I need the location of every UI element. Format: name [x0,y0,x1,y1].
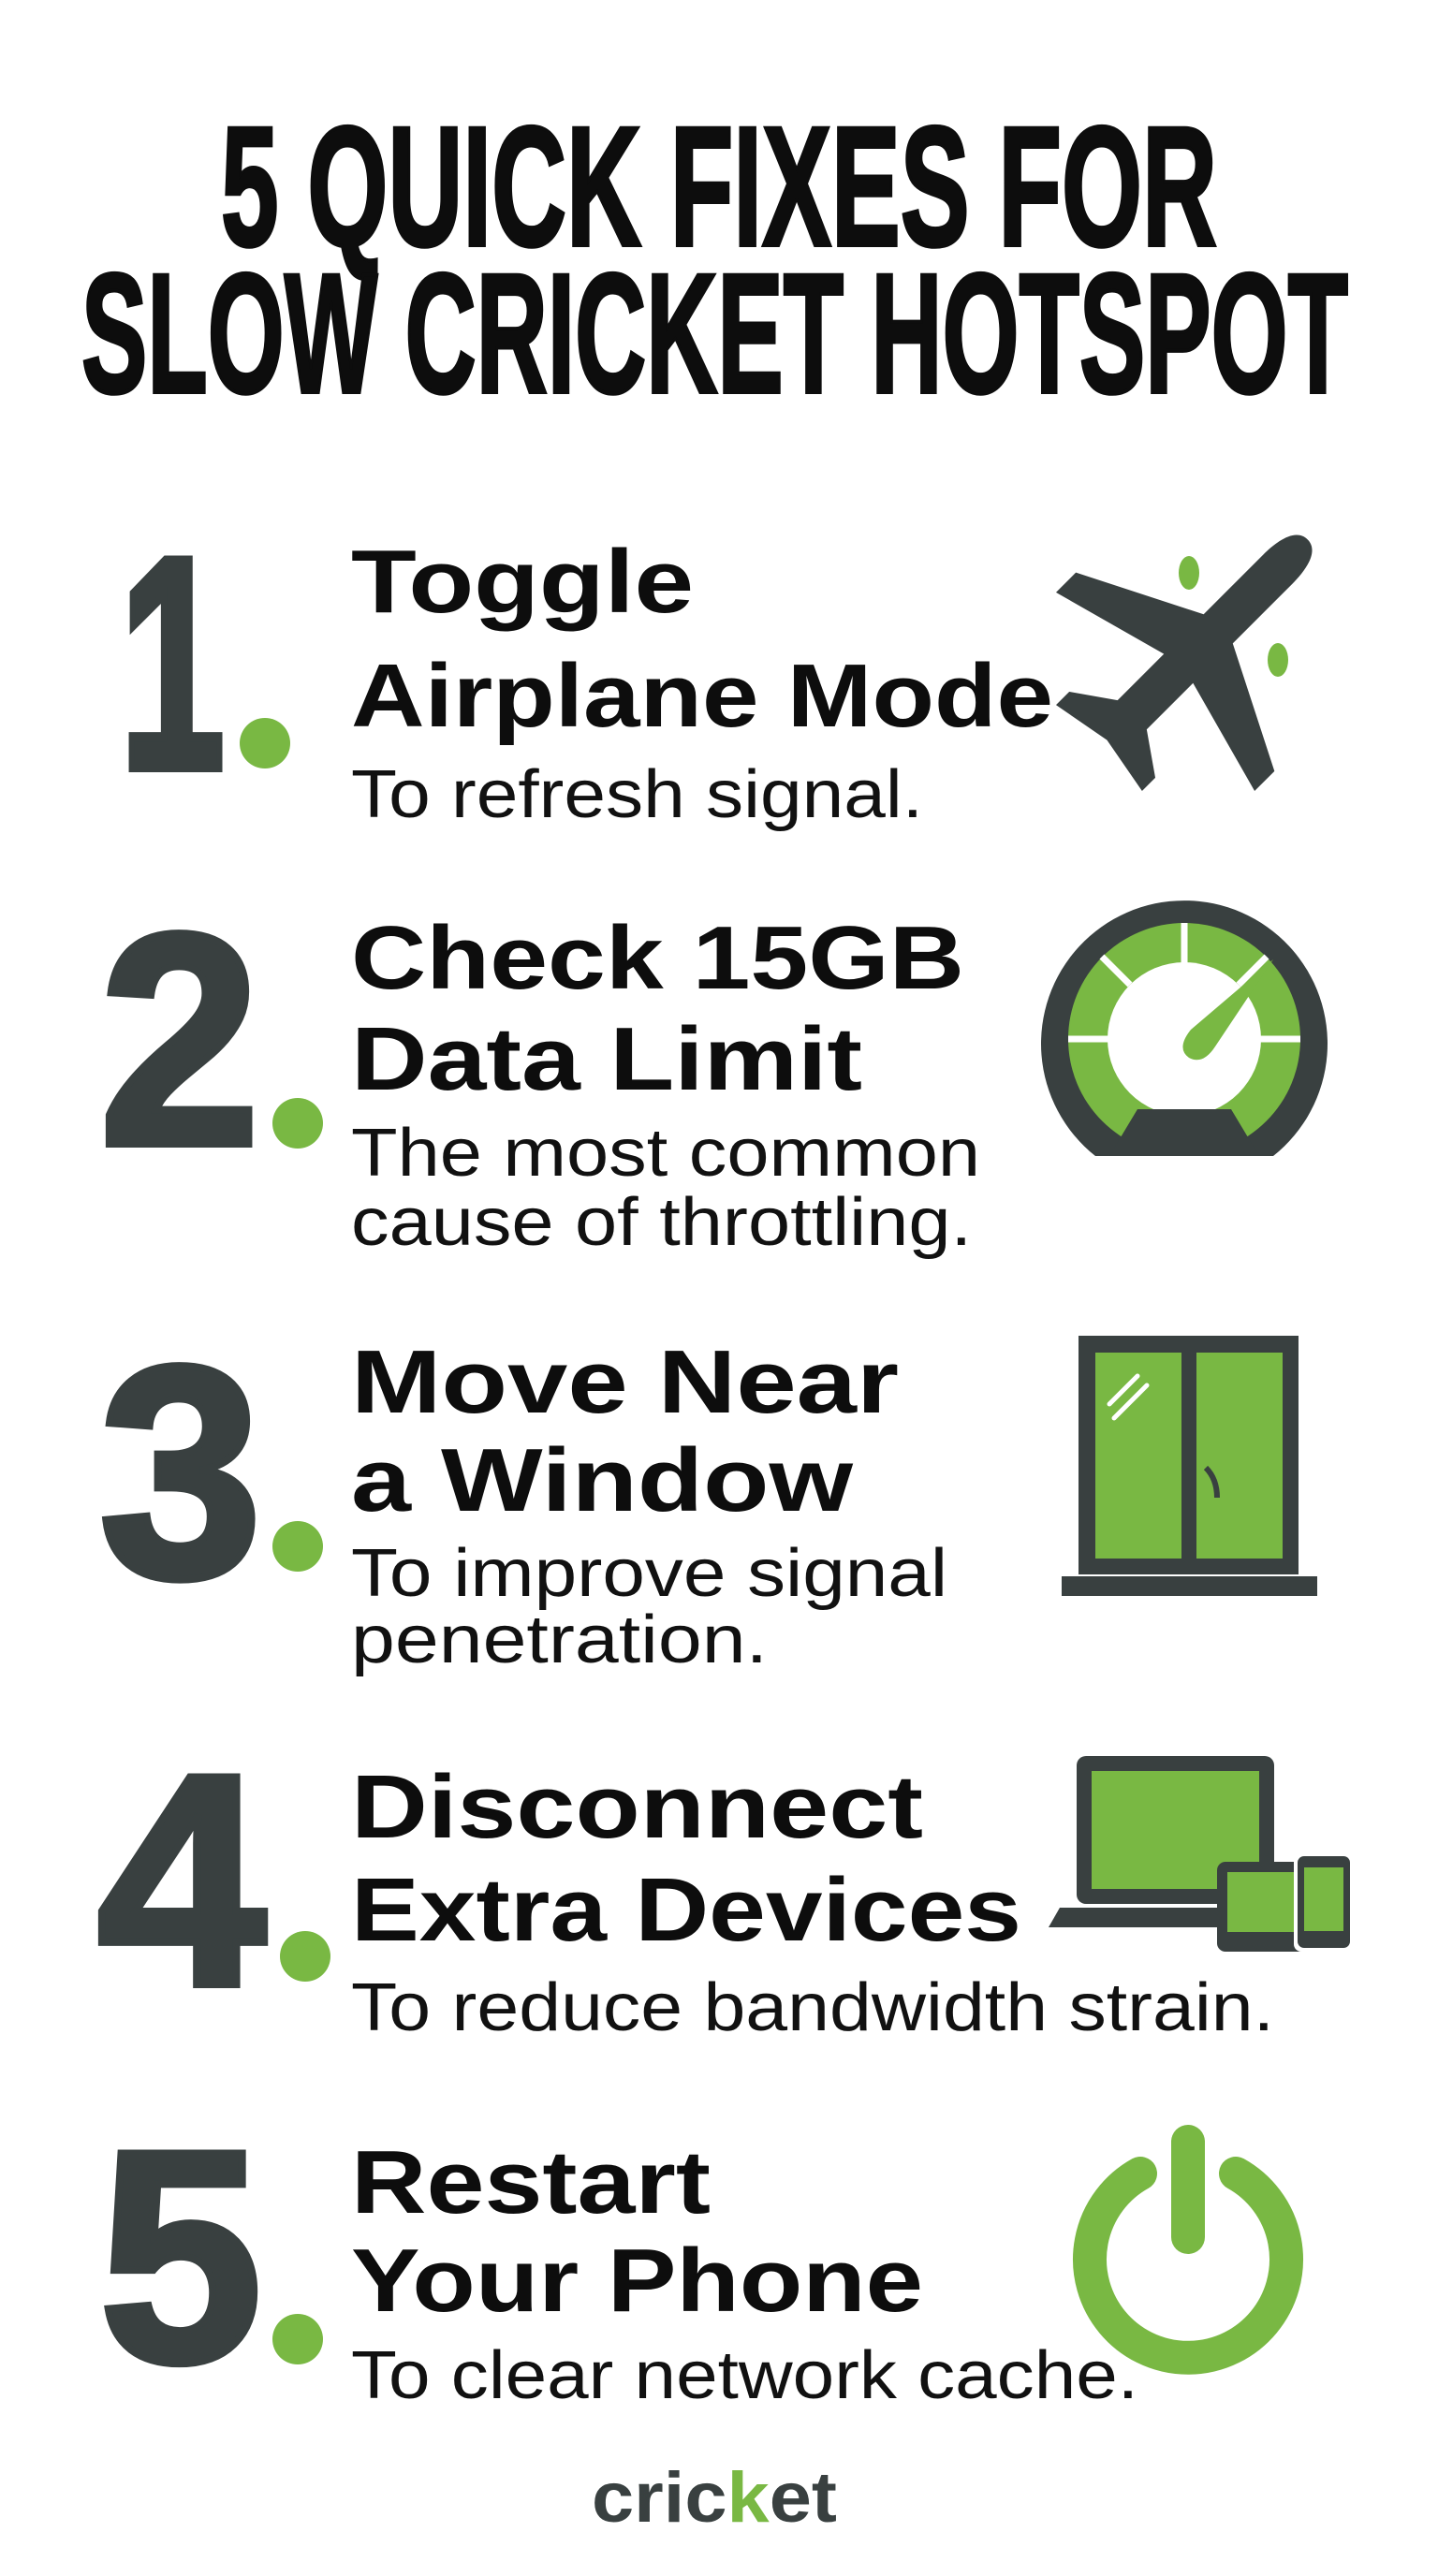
subtitle: cause of throttling. [351,1185,972,1260]
number 5: 5 [99,2089,262,2425]
heading: a Window [351,1430,853,1530]
heading [351,1332,899,1530]
icon: speedometer [1041,900,1328,1156]
dot [272,2314,323,2364]
heading: Airplane Mode [351,646,1053,746]
subtitle: To clear network cache. [351,2338,1138,2413]
icon: power [1090,2142,1286,2358]
subtitle [351,1116,980,1260]
item 5: restart your phone [99,2089,1286,2425]
subtitle: The most common [351,1116,980,1191]
heading: Disconnect [351,1757,923,1857]
logo: cricket: cricket [592,2458,837,2538]
subtitle: To improve signal [351,1536,947,1611]
number 2: 2 [99,872,260,1208]
item 3: move near a window [99,1305,1317,1677]
heading: Toggle [351,532,694,632]
heading [351,532,1053,746]
item 2: check data limit [99,872,1328,1260]
subtitle: To refresh signal. [351,757,923,832]
heading: Restart [351,2132,711,2232]
item 1: toggle airplane mode [120,440,1407,847]
heading: Your Phone [351,2231,923,2331]
dot [272,1098,323,1149]
dot [280,1931,330,1982]
icon: window [1062,1336,1317,1596]
subtitle: To reduce bandwidth strain. [351,1970,1274,2045]
subtitle: penetration. [351,1603,768,1677]
heading: Data Limit [351,1009,862,1109]
icon: devices [1049,1756,1354,1952]
subtitle [351,1536,947,1677]
icon: airplane [1000,440,1407,847]
dot [272,1521,323,1572]
heading [351,1757,1021,1960]
heading [351,2132,923,2331]
heading: Move Near [351,1332,899,1432]
number 1: 1 [120,496,225,832]
number 3: 3 [99,1305,262,1641]
dot [240,718,290,768]
heading: Extra Devices [351,1860,1021,1960]
item 4: disconnect extra devices [97,1713,1354,2049]
heading [351,908,964,1109]
number 4: 4 [97,1713,268,2049]
title [81,91,1348,429]
heading: Check 15GB [351,908,964,1008]
